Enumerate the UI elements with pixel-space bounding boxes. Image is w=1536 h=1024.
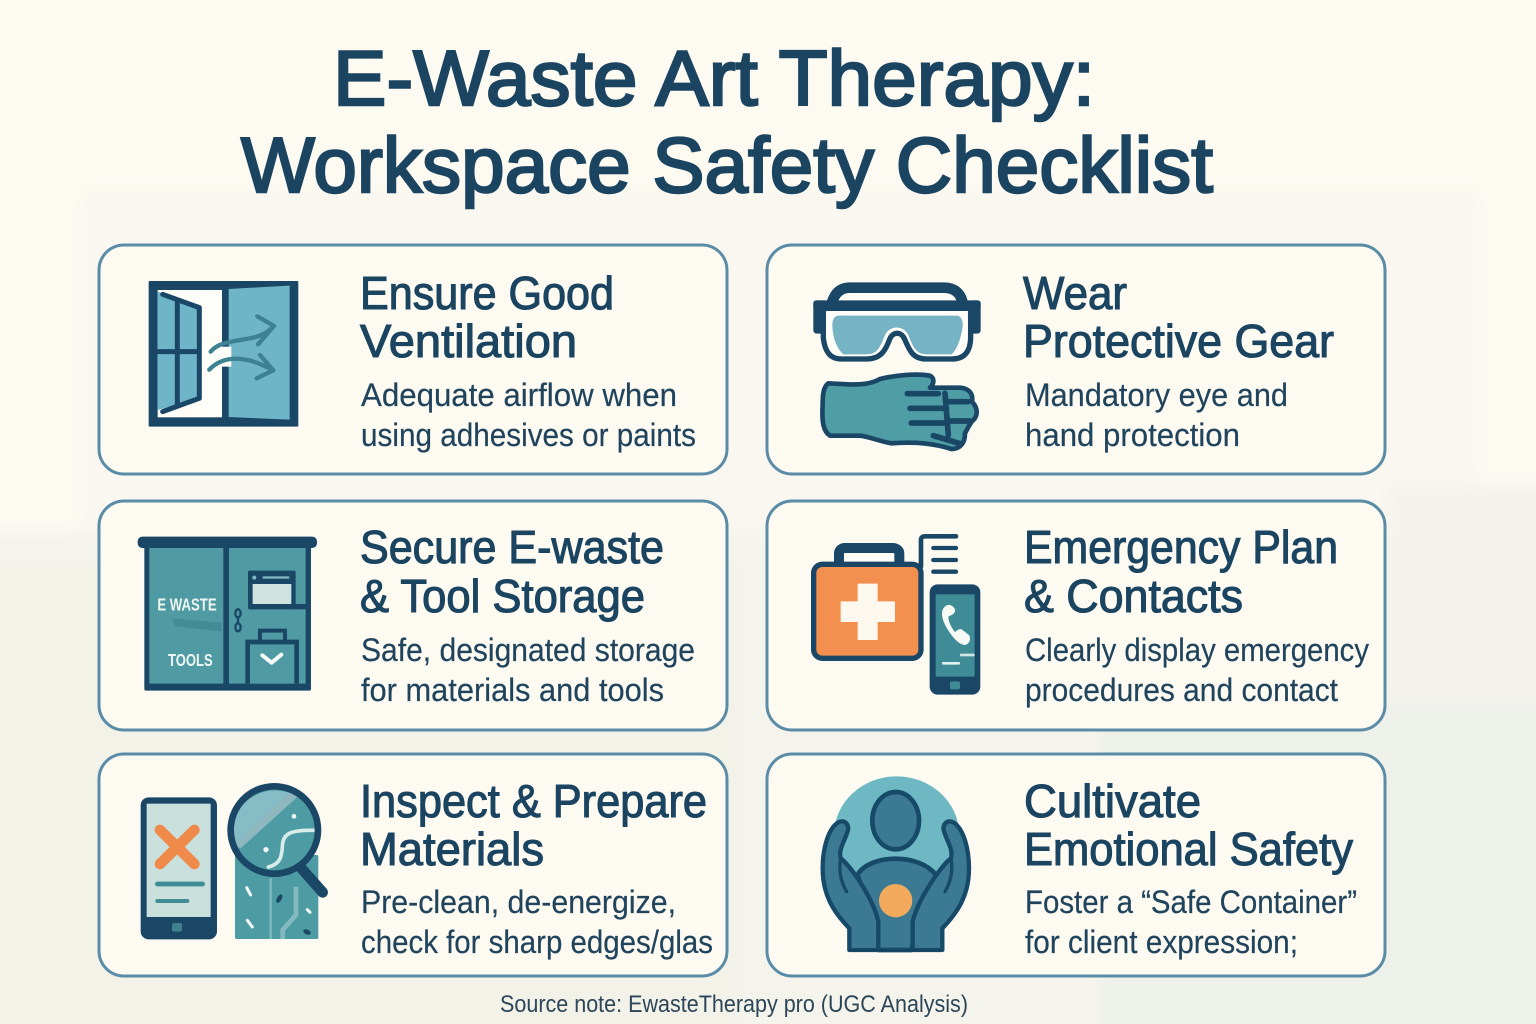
icon: person held by caring hands	[823, 776, 969, 950]
icon: open window with airflow arrows	[149, 281, 298, 427]
description: hand protection	[1025, 417, 1240, 453]
heading	[1024, 521, 1338, 622]
heading: Inspect & Prepare	[360, 775, 707, 827]
description	[361, 884, 713, 960]
description: for client expression;	[1025, 924, 1298, 960]
panel: inspect and prepare materials	[99, 754, 727, 976]
heading	[1024, 775, 1353, 875]
icon: storage cabinet: E WASTE	[157, 595, 217, 615]
panel: secure e-waste and tool storage	[99, 501, 727, 730]
icon: first-aid kit and phone	[814, 536, 980, 695]
heading	[360, 521, 664, 622]
description: Foster a “Safe Container”	[1025, 884, 1357, 920]
description	[1025, 632, 1369, 708]
panel: wear protective gear	[767, 245, 1385, 474]
heading: & Contacts	[1024, 570, 1243, 622]
heading: Cultivate	[1024, 775, 1201, 827]
heading: & Tool Storage	[360, 570, 645, 622]
description	[361, 377, 696, 453]
description: Safe, designated storage	[361, 632, 695, 668]
heading: Protective Gear	[1023, 315, 1334, 367]
description	[361, 632, 695, 708]
heading: Ventilation	[360, 315, 577, 367]
description: Adequate airflow when	[361, 377, 677, 413]
heading	[1023, 267, 1334, 367]
heading: Materials	[360, 823, 544, 875]
description: Clearly display emergency	[1025, 632, 1369, 668]
icon: storage cabinet	[138, 537, 317, 691]
description: for materials and tools	[361, 672, 664, 708]
description	[1025, 377, 1288, 453]
heading: Secure E-waste	[360, 521, 664, 573]
title	[241, 34, 1213, 209]
description	[1025, 884, 1357, 960]
description: Pre-clean, de-energize,	[361, 884, 676, 920]
panel: cultivate emotional safety	[767, 754, 1385, 976]
description: using adhesives or paints	[361, 417, 696, 453]
title: E-Waste Art Therapy:	[333, 34, 1095, 122]
source note: Source note: EwasteTherapy pro (UGC Analysis)	[500, 991, 968, 1018]
heading	[360, 267, 614, 367]
heading	[360, 775, 707, 875]
icon: goggles and glove	[813, 288, 981, 449]
icon: phone and magnifier over circuit board	[141, 786, 323, 939]
title: Workspace Safety Checklist	[241, 121, 1213, 209]
heading: Wear	[1023, 267, 1127, 319]
description: procedures and contact	[1025, 672, 1338, 708]
panel: emergency plan and contacts	[767, 501, 1385, 730]
icon: storage cabinet: TOOLS	[168, 650, 213, 670]
heading: Ensure Good	[360, 267, 614, 319]
description: check for sharp edges/glas	[361, 924, 713, 960]
description: Mandatory eye and	[1025, 377, 1288, 413]
panel: ensure good ventilation	[99, 245, 727, 474]
heading: Emergency Plan	[1024, 521, 1338, 573]
heading: Emotional Safety	[1024, 823, 1353, 875]
